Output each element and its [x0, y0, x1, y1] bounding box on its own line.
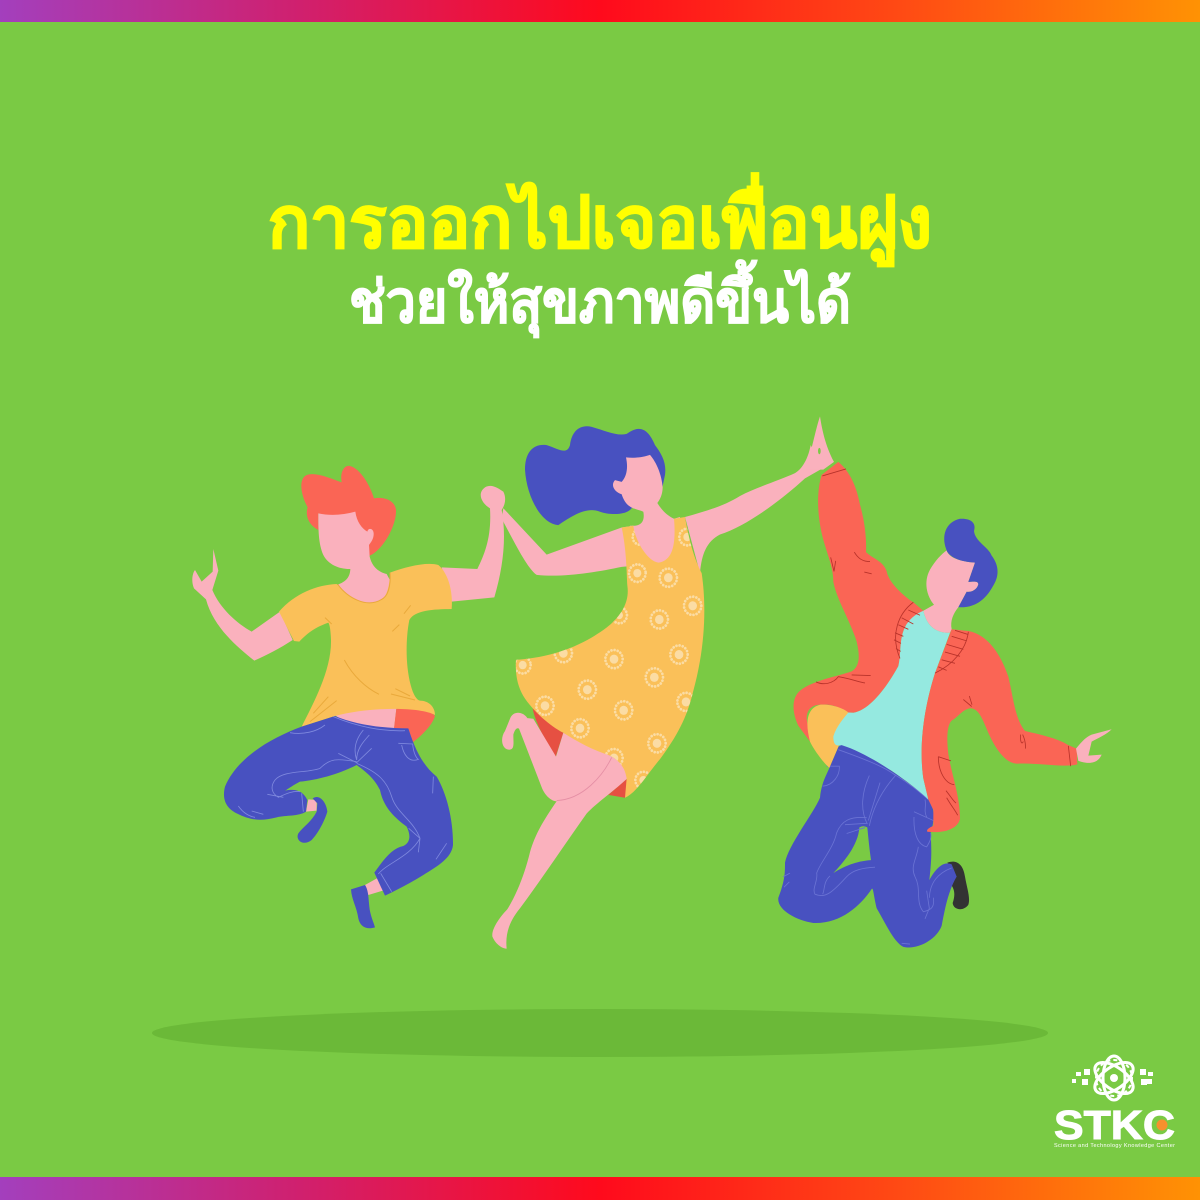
STKC logo — [1054, 1056, 1175, 1149]
bottom gradient bar — [0, 1177, 1200, 1200]
subtitle: ช่วยให้สุขภาพดีขึ้นได้ — [349, 260, 851, 339]
logo wordmark: STKC — [1054, 1102, 1175, 1148]
top gradient bar — [0, 0, 1200, 22]
icon: atom — [1090, 1056, 1138, 1100]
person: middle woman in yellow dress — [492, 426, 823, 949]
logo tagline: Science and Technology Knowledge Center — [1054, 1143, 1175, 1149]
person: right man in orange cardigan — [778, 416, 1112, 948]
title — [268, 172, 932, 339]
person: left man in yellow shirt — [192, 466, 505, 928]
title: การออกไปเจอเพื่อนฝูง — [268, 172, 932, 267]
ground shadow — [152, 1009, 1048, 1057]
